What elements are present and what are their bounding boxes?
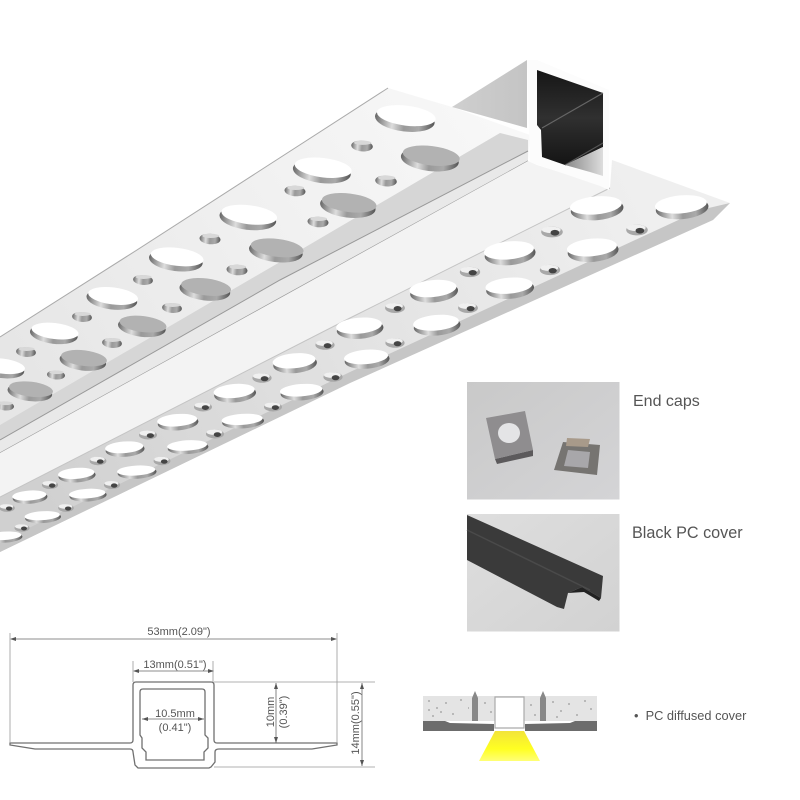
label: end caps: End caps (633, 393, 700, 410)
fold band (0, 133, 528, 440)
icon: left end cap (486, 411, 533, 464)
icon: black cover profile (467, 515, 603, 609)
upper flange small holes (0, 140, 397, 411)
light beam (479, 731, 540, 761)
label: 10.5mm: 10.5mm (155, 708, 195, 720)
right base strip (525, 721, 597, 731)
dimension drawing (10, 626, 375, 768)
center white panel (0, 161, 610, 497)
dimension arrowheads (10, 637, 364, 766)
dimension lines (10, 633, 375, 767)
fold strip (0, 151, 528, 453)
section diagram: installation (423, 691, 597, 761)
upper flange gray holes (6, 143, 461, 404)
icon: right end cap (554, 438, 600, 475)
plaster wall (423, 696, 597, 721)
black cover lower ridge (565, 143, 603, 165)
main aluminium profile (0, 60, 730, 552)
channel frame (527, 60, 609, 190)
gray corner wall of channel (452, 60, 527, 128)
plaster speckle (428, 700, 592, 717)
profile cross-section (10, 682, 337, 768)
lower flange (0, 160, 730, 552)
label: 14mm: 14mm(0.55") (350, 691, 362, 755)
upper flange open holes (0, 102, 437, 381)
black cover inside channel (537, 70, 603, 165)
label: 53mm: 53mm(2.09") (147, 626, 211, 638)
channel (495, 697, 524, 728)
label: PC diffused cover: • PC diffused cover (634, 708, 747, 723)
label: 0.39 in: (0.39") (278, 696, 290, 728)
panel lower line (0, 188, 610, 497)
left base strip (423, 721, 494, 731)
panel: black PC cover photo (467, 514, 620, 632)
left screw (472, 691, 478, 721)
panel: end caps photo (467, 382, 620, 500)
fold lines (0, 151, 528, 453)
lower flange small holes (0, 225, 648, 532)
lower flange big holes inner row (12, 194, 624, 505)
label: 10mm: 10mm (265, 697, 277, 727)
label: 0.41 in: (0.41") (159, 722, 191, 734)
gray wall below cover (565, 147, 603, 176)
upper flange outer edge (0, 88, 388, 337)
label: 13mm: 13mm(0.51") (143, 659, 207, 671)
label: black PC cover: Black PC cover (632, 524, 743, 542)
right screw (540, 691, 546, 721)
lower flange big holes outer row (0, 193, 709, 544)
black cover ridge (542, 93, 603, 128)
upper flange (0, 88, 530, 453)
lower flange edge bevel (0, 203, 730, 552)
